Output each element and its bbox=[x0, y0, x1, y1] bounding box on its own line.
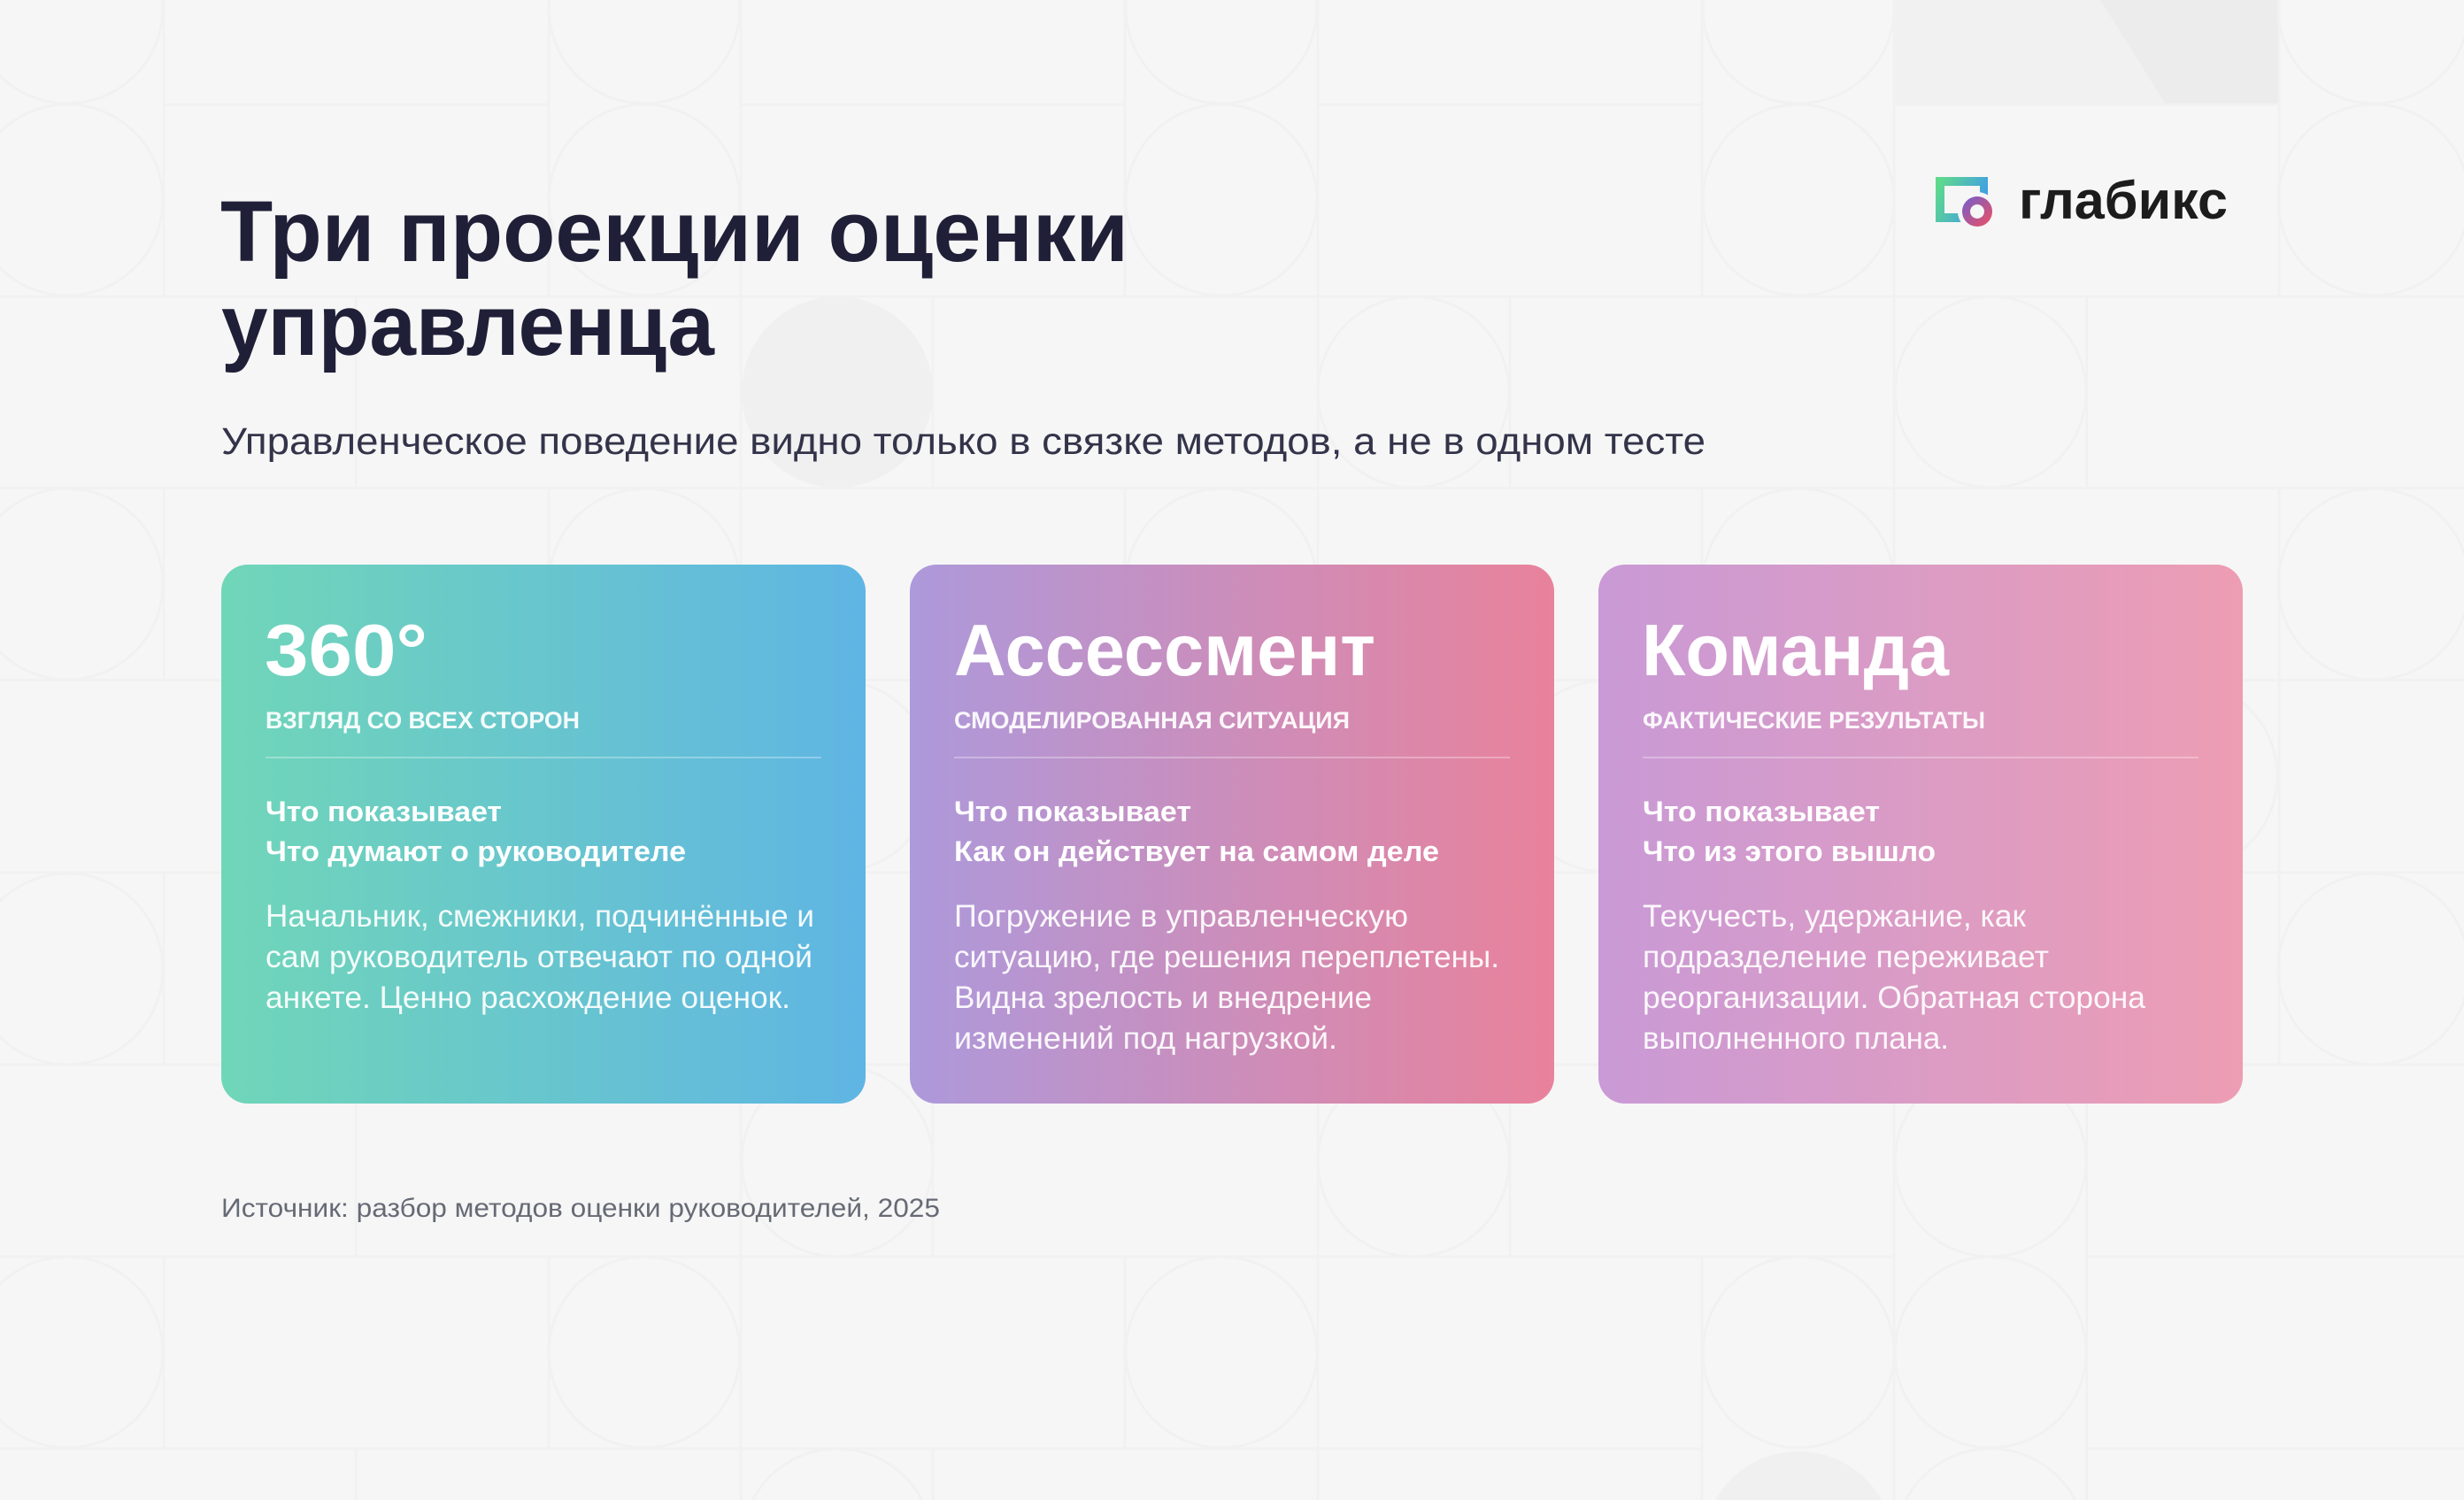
description bbox=[266, 899, 814, 1015]
description: реорганизации. Обратная сторона bbox=[1643, 981, 2146, 1015]
card heading: Команда bbox=[1642, 609, 1950, 691]
card subheading: ФАКТИЧЕСКИЕ РЕЗУЛЬТАТЫ bbox=[1643, 707, 1985, 734]
description: подразделение переживает bbox=[1643, 940, 2049, 974]
what it shows: Что показывает bbox=[954, 796, 1191, 827]
description: сам руководитель отвечают по одной bbox=[266, 940, 812, 974]
description bbox=[1643, 899, 2146, 1056]
logo bbox=[1936, 171, 2228, 231]
divider bbox=[954, 757, 1510, 758]
card heading: 360° bbox=[265, 609, 427, 691]
title bbox=[220, 183, 1128, 373]
panel: assessment card bbox=[910, 565, 1554, 1104]
logo wordmark: глабикс bbox=[2019, 171, 2228, 230]
description bbox=[954, 899, 1499, 1056]
panel: 360° card bbox=[221, 565, 866, 1104]
what it shows bbox=[954, 796, 1439, 867]
description: Видна зрелость и внедрение bbox=[954, 981, 1372, 1015]
title: Три проекции оценки bbox=[220, 183, 1128, 280]
divider bbox=[1643, 757, 2198, 758]
description: ситуацию, где решения переплетены. bbox=[954, 940, 1499, 974]
divider bbox=[266, 757, 821, 758]
subtitle: Управленческое поведение видно только в связке методов, а не в одном тесте bbox=[221, 420, 1706, 463]
description: выполненного плана. bbox=[1643, 1021, 1949, 1056]
what it shows: Что из этого вышло bbox=[1643, 835, 1936, 867]
description: Текучесть, удержание, как bbox=[1643, 899, 2027, 934]
what it shows: Что показывает bbox=[266, 796, 502, 827]
what it shows bbox=[1643, 796, 1936, 867]
what it shows: Как он действует на самом деле bbox=[954, 835, 1439, 867]
title: управленца bbox=[221, 277, 715, 373]
what it shows bbox=[266, 796, 686, 867]
card heading: Ассессмент bbox=[954, 609, 1375, 691]
panel: team card bbox=[1598, 565, 2243, 1104]
description: Погружение в управленческую bbox=[954, 899, 1408, 934]
description: анкете. Ценно расхождение оценок. bbox=[266, 981, 790, 1015]
card subheading: СМОДЕЛИРОВАННАЯ СИТУАЦИЯ bbox=[954, 707, 1350, 734]
what it shows: Что думают о руководителе bbox=[266, 835, 686, 867]
source note: Источник: разбор методов оценки руководителей, 2025 bbox=[221, 1194, 940, 1223]
what it shows: Что показывает bbox=[1643, 796, 1880, 827]
card subheading: ВЗГЛЯД СО ВСЕХ СТОРОН bbox=[266, 707, 580, 734]
description: Начальник, смежники, подчинённые и bbox=[266, 899, 814, 934]
description: изменений под нагрузкой. bbox=[954, 1021, 1337, 1056]
icon: logo mark bbox=[1936, 177, 1997, 231]
